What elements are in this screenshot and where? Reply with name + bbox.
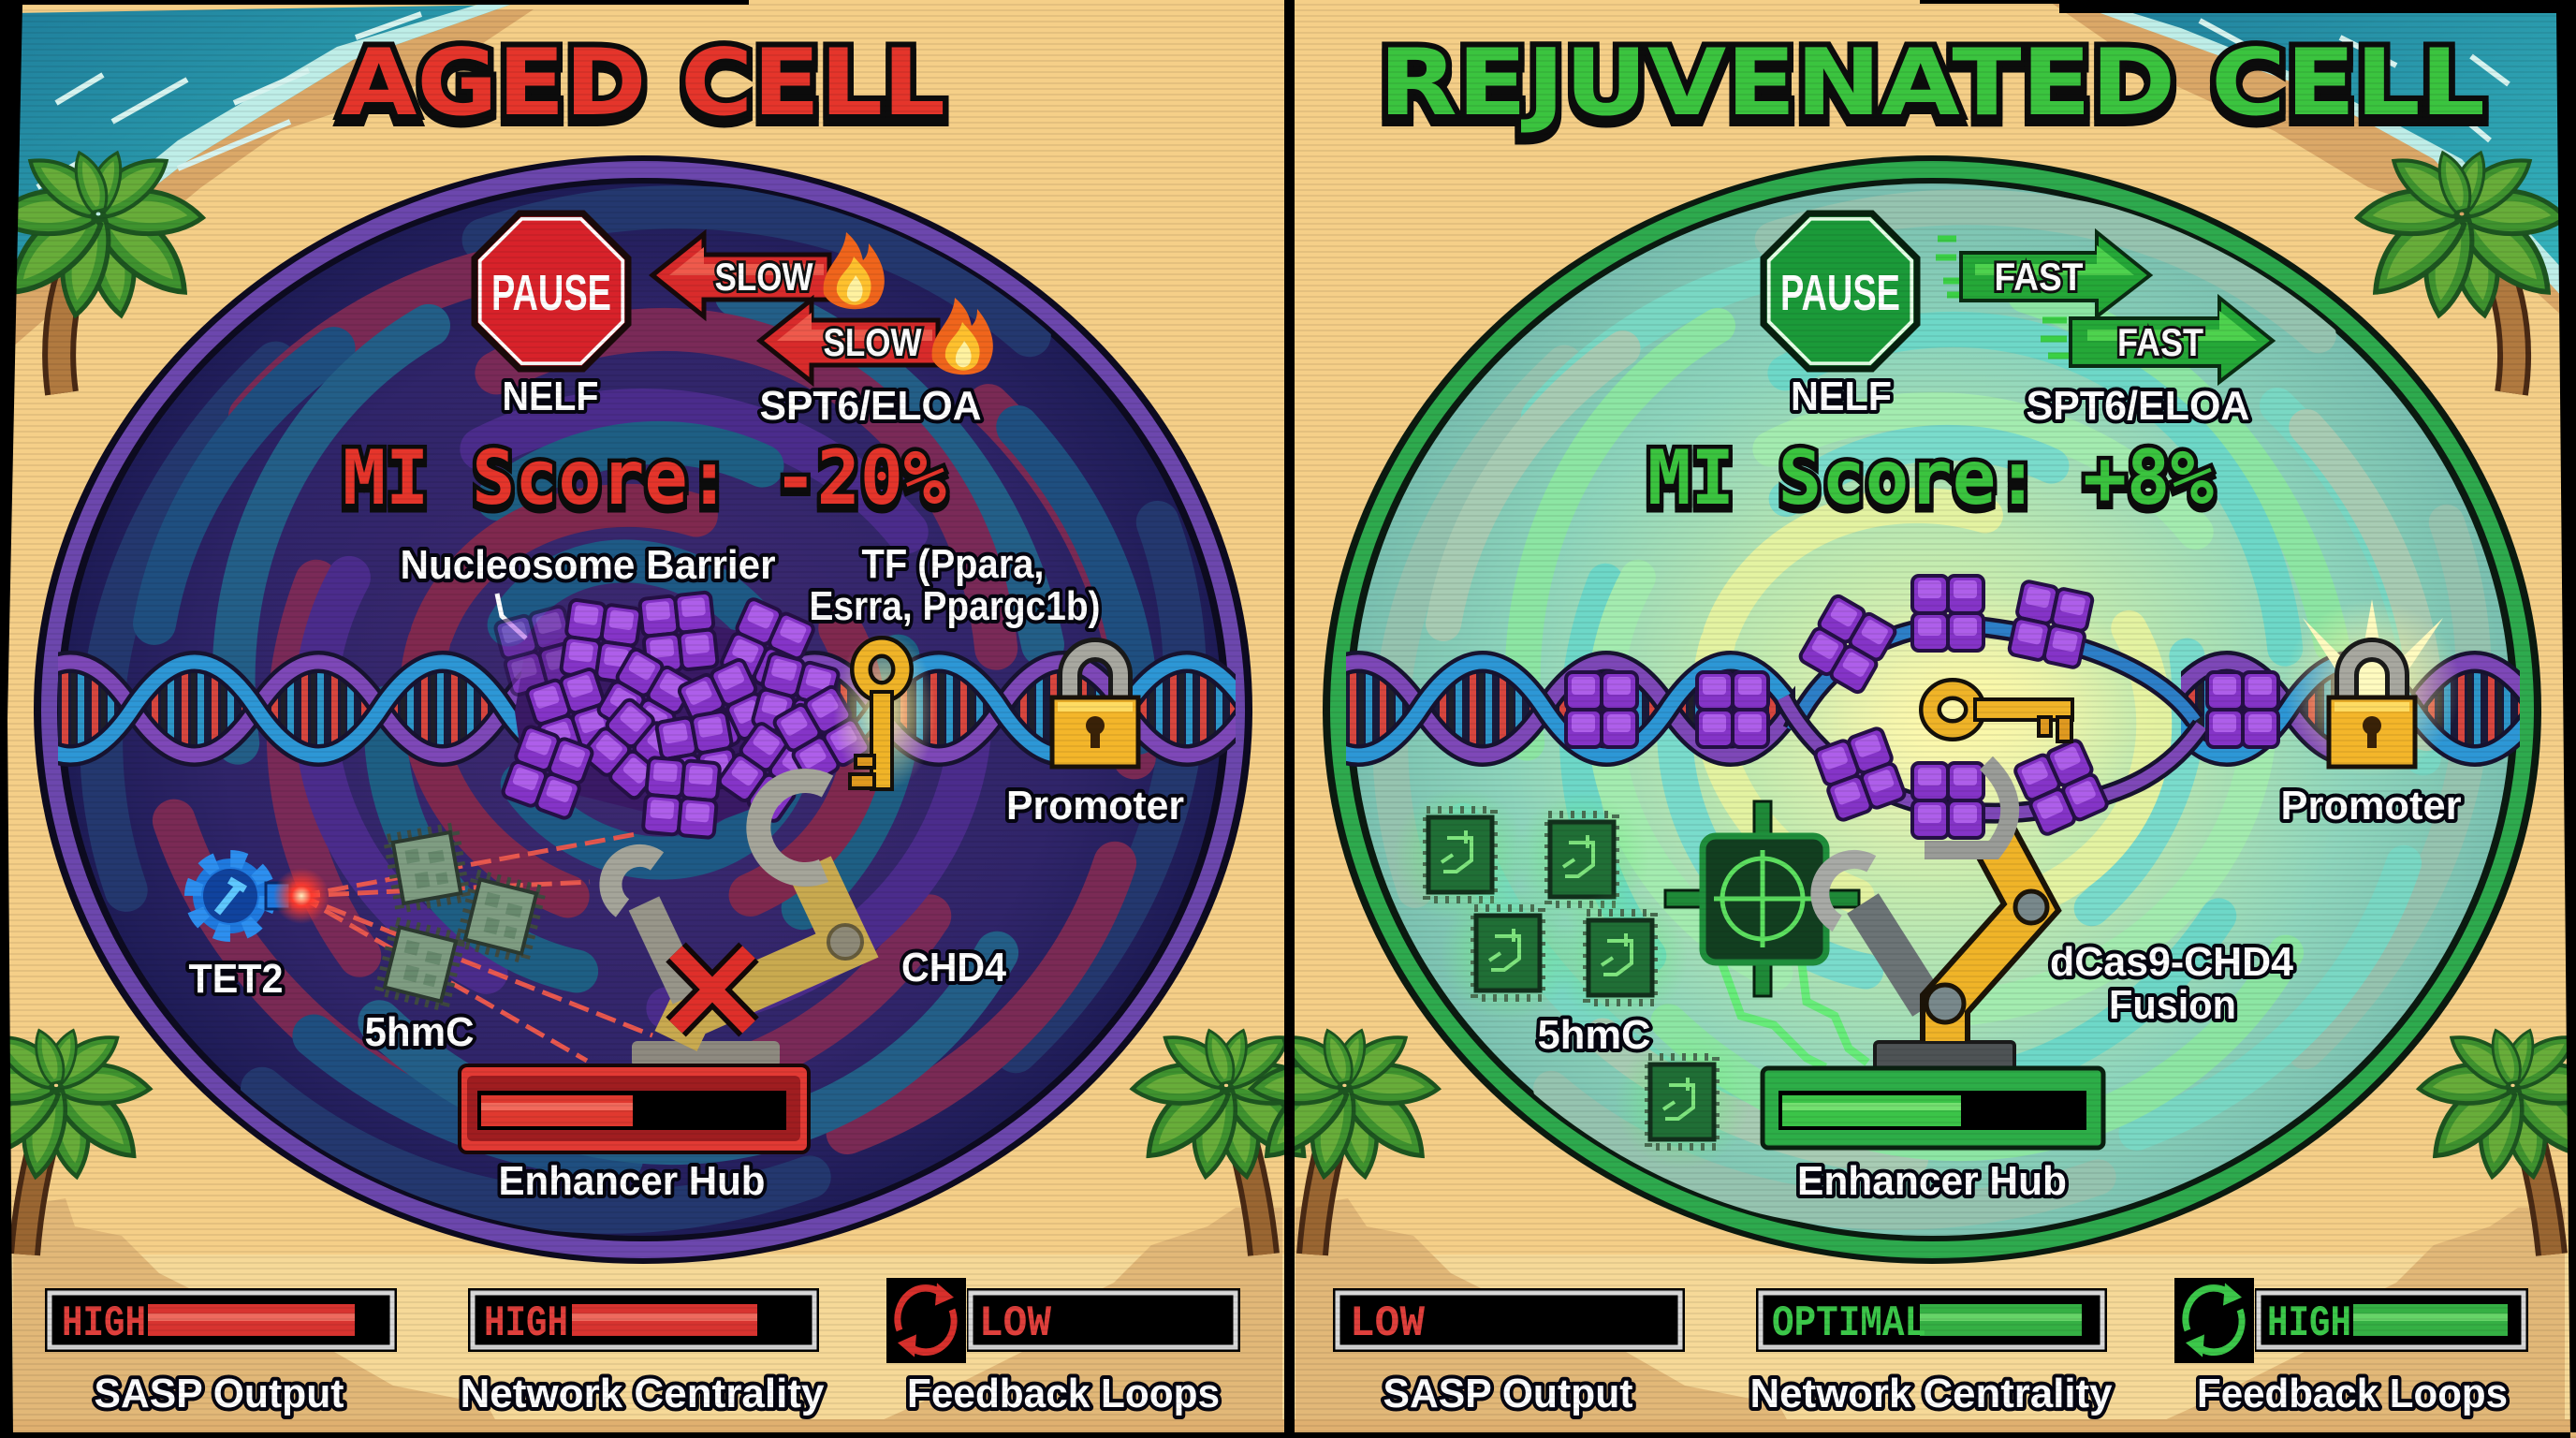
- DNA helix: [58, 651, 1236, 767]
- label: 5hmC: 5hmC: [365, 1009, 474, 1055]
- panel: rejuvenated cell: [1248, 30, 2576, 1416]
- label: promoter: Promoter: [1006, 783, 1184, 829]
- faded robotic arm: [610, 781, 862, 1067]
- DNA helix left part: [1346, 651, 1795, 767]
- text: slow 1: SLOW: [715, 255, 813, 299]
- label: feedback loops: Feedback Loops: [907, 1371, 1220, 1416]
- nucleosome cluster: [494, 592, 871, 838]
- label: nucleosome barrier: Nucleosome Barrier: [401, 542, 775, 588]
- label: network centrality: Network Centrality: [1750, 1371, 2113, 1416]
- palm tree bottom right, left panel: [1130, 1020, 1323, 1255]
- label: SPT6/ELOA: SPT6/ELOA: [760, 383, 981, 429]
- label: TF: TF (Ppara,: [861, 541, 1045, 587]
- status bar: network centrality: [1756, 1288, 2107, 1352]
- stop sign: NELF pause: [475, 213, 628, 369]
- icon: TET2 gear: [193, 858, 329, 933]
- icon: padlock: [1052, 650, 1138, 767]
- label: dCas9-CHD4: dCas9-CHD4: [2050, 939, 2294, 985]
- label: SASP output: SASP Output: [1383, 1371, 1633, 1416]
- beach water top right: [2050, 2, 2565, 318]
- arrow: fast 1: [1936, 232, 2150, 316]
- pointer: nucleosome barrier: [497, 594, 526, 638]
- DNA helix right part: [2181, 651, 2520, 767]
- open DNA bubble: [1783, 625, 2202, 814]
- label: CHD4: CHD4: [901, 945, 1006, 990]
- cell membrane: [34, 155, 1252, 1264]
- label: NELF: NELF: [1791, 374, 1892, 419]
- label: promoter: Promoter: [2280, 783, 2462, 829]
- status bar: feedback loops: [886, 1278, 1240, 1363]
- centre glow: [1810, 588, 2166, 831]
- icons: 5hmC chips: [1393, 787, 1749, 1169]
- icon: key: [1930, 689, 2072, 741]
- status bar: network centrality: [468, 1288, 819, 1352]
- arrow: slow 2: [760, 298, 993, 382]
- swirling cytoplasm: [80, 185, 1206, 1234]
- text: fast 1: FAST: [1994, 255, 2084, 299]
- label: enhancer hub: Enhancer Hub: [498, 1158, 766, 1204]
- icon: loop green: [2186, 1283, 2242, 1357]
- palm tree bottom right, right panel: [2416, 1020, 2576, 1255]
- label: Fusion: Fusion: [2109, 982, 2236, 1028]
- stop sign: NELF pause green: PAUSE: [1780, 265, 1900, 321]
- cell membrane: [1323, 155, 2541, 1264]
- swirling cytoplasm: [1373, 189, 2491, 1230]
- icon: red X: [676, 952, 749, 1027]
- palm tree top left: [0, 140, 206, 393]
- green energy trails: [1722, 964, 1867, 1067]
- palm tree bottom left, left panel: [0, 1020, 153, 1255]
- palm tree top right: [2354, 140, 2569, 393]
- icon: flame 2: [932, 298, 993, 374]
- icon: loop red: [898, 1283, 954, 1357]
- text: high: HIGH: [62, 1299, 146, 1348]
- beach water top left: [13, 5, 534, 346]
- chips: 5hmC: [379, 827, 542, 1007]
- beam lines: [300, 833, 652, 1061]
- icon: glowing key: [833, 632, 936, 791]
- robotic arm: [1817, 763, 2047, 1070]
- lower beach sand and dunes: [0, 1198, 2576, 1438]
- text: high: HIGH: [484, 1299, 568, 1348]
- title: aged cell: AGED CELL: [341, 30, 945, 137]
- label: feedback loops: Feedback Loops: [2197, 1371, 2508, 1416]
- stop sign: NELF pause: PAUSE: [491, 265, 611, 321]
- status bar: feedback loops: [2174, 1278, 2528, 1363]
- text: low: LOW: [979, 1299, 1051, 1348]
- status bar: SASP: [45, 1288, 397, 1352]
- label: TET2: TET2: [189, 956, 283, 1002]
- arrow: slow 1: [652, 232, 885, 316]
- label: 5hmC: 5hmC: [1537, 1012, 1651, 1058]
- text: low: LOW: [1350, 1299, 1425, 1348]
- stop sign: NELF pause green: [1764, 213, 1917, 369]
- nucleosomes on open DNA: [1566, 576, 2278, 838]
- palm tree bottom left, right panel: [1248, 1020, 1442, 1255]
- label: NELF: NELF: [502, 374, 599, 419]
- label: SPT6/ELOA: SPT6/ELOA: [2026, 383, 2250, 429]
- title: rejuvenated cell: REJUVENATED CELL: [1379, 30, 2485, 137]
- text: slow 2: SLOW: [824, 320, 922, 364]
- status bar: SASP: [1333, 1288, 1685, 1352]
- text: fast 2: FAST: [2117, 320, 2203, 364]
- label: TF factors: Esrra, Ppargc1b): [809, 583, 1101, 629]
- label: SASP output: SASP Output: [94, 1371, 344, 1416]
- arrow: fast 2: [2041, 298, 2273, 382]
- label: enhancer hub: Enhancer Hub: [1797, 1158, 2067, 1204]
- icon: flame 1: [824, 232, 885, 309]
- label: network centrality: Network Centrality: [461, 1371, 825, 1416]
- bar: enhancer hub: [1763, 1068, 2103, 1148]
- icon: target dCas9: [1665, 801, 1859, 996]
- icon: padlock with glow: [2283, 599, 2461, 777]
- panel: aged cell: [0, 30, 1327, 1416]
- score: MI +8%: MI Score: +8%: [1647, 434, 2214, 521]
- text: high: HIGH: [2267, 1299, 2351, 1348]
- score: MI -20%: MI Score: -20%: [343, 434, 946, 521]
- bar: enhancer hub: [460, 1065, 809, 1152]
- text: optimal: OPTIMAL: [1772, 1299, 1926, 1348]
